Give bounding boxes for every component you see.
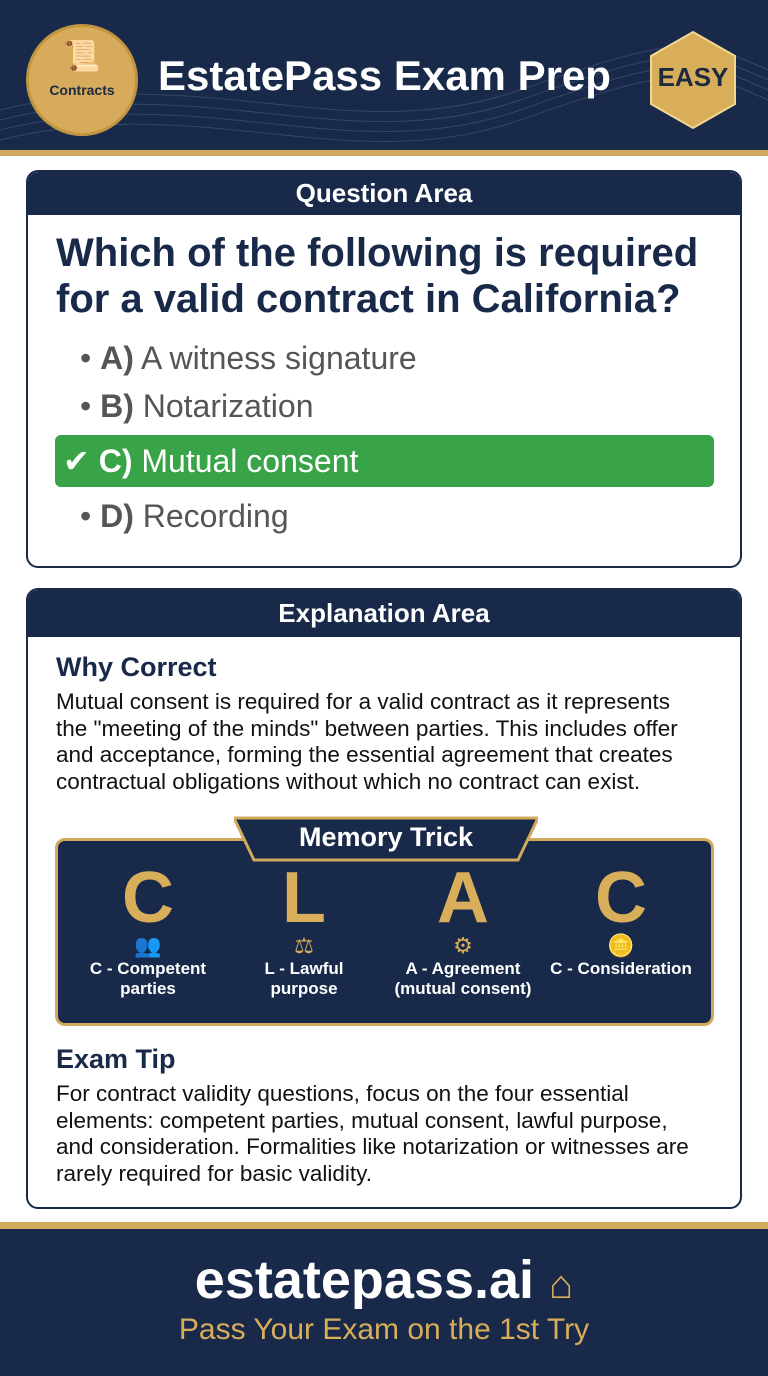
item C consideration: C — [595, 858, 647, 938]
icon: contracts badge — [26, 24, 138, 136]
icon: contracts badge: Contracts — [49, 82, 115, 98]
footer brand: estatepass.ai ⌂ — [195, 1250, 573, 1310]
item C consideration — [550, 858, 692, 978]
why correct: Why Correct — [56, 652, 217, 682]
item L lawful — [264, 858, 344, 998]
panel: question — [26, 170, 742, 568]
item A agreement: ⚙ — [453, 933, 473, 958]
option B: • B) Notarization — [80, 388, 314, 424]
item L lawful: L - Lawful — [264, 959, 344, 978]
banner: memory trick: Memory Trick — [299, 822, 473, 852]
heading: explanation area — [28, 590, 740, 637]
exam tip: For contract validity questions, focus on the four essential elements: competent parties, mutual consent, lawful purpose, and consideration. Formalities like notarization or witnesses are rarely required for basic validity. — [56, 1081, 689, 1186]
icon: contracts badge: 📜 — [63, 40, 101, 73]
why correct: Mutual consent is required for a valid contract as it represents the "meeting of the minds" between parties. This includes offer and acceptance, forming the essential agreement that creates contractual obligations without which no contract can exist. — [56, 689, 678, 794]
item A agreement: (mutual consent) — [395, 979, 531, 998]
footer — [0, 1222, 768, 1229]
exam tip: Exam Tip — [56, 1044, 176, 1074]
item C consideration: 🪙 — [607, 933, 635, 958]
option A: • A) A witness signature — [80, 340, 417, 376]
item C consideration: C - Consideration — [550, 959, 692, 978]
question text: Which of the following is required — [56, 231, 698, 275]
header — [0, 0, 768, 152]
option C correct: ✔ C) Mutual consent — [63, 443, 358, 479]
heading: question area — [28, 172, 740, 215]
tagline: Pass Your Exam on the 1st Try — [179, 1313, 589, 1346]
memory trick box — [55, 838, 714, 1026]
panel: explanation — [26, 588, 742, 1209]
option C correct — [55, 435, 714, 487]
item C competent: C - Competent — [90, 959, 206, 978]
heading: explanation area: Explanation Area — [278, 598, 490, 628]
badge: easy — [650, 30, 736, 130]
item A agreement: A — [437, 858, 489, 938]
item C competent — [90, 858, 206, 998]
badge: easy: EASY — [658, 62, 728, 92]
item L lawful: L — [282, 858, 326, 938]
item C competent: C — [122, 858, 174, 938]
option D: • D) Recording — [80, 498, 289, 534]
title: EstatePass Exam Prep — [158, 52, 611, 99]
question text — [56, 231, 698, 321]
item A agreement — [395, 858, 531, 998]
question text: for a valid contract in California? — [56, 277, 681, 321]
heading: question area: Question Area — [296, 178, 472, 208]
item L lawful: purpose — [270, 979, 338, 998]
item A agreement: A - Agreement — [406, 959, 520, 978]
item C competent: parties — [120, 979, 176, 998]
banner: memory trick — [234, 816, 538, 862]
item L lawful: ⚖ — [294, 933, 314, 958]
item C competent: 👥 — [134, 933, 162, 958]
